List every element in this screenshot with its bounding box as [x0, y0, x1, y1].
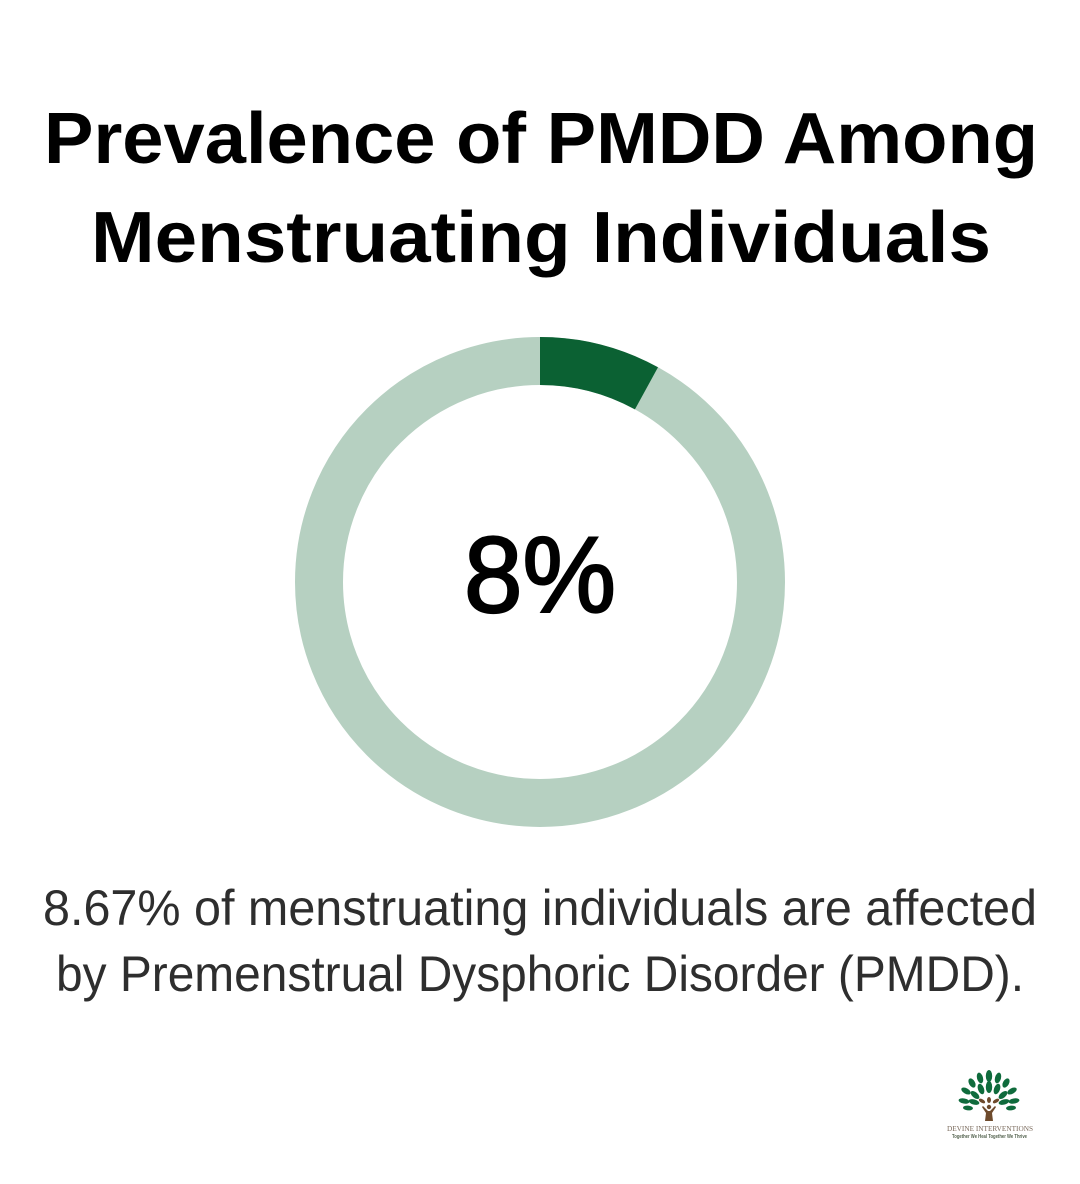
description: 8.67% of menstruating individuals are affected	[43, 880, 1037, 936]
logo: Devine Interventions	[947, 1070, 1033, 1140]
icon: tree trunk figure	[978, 1097, 1000, 1121]
title	[44, 99, 1038, 278]
donut chart	[319, 337, 761, 803]
donut segment: 8%	[540, 337, 658, 409]
icon: tree leaves	[958, 1070, 1020, 1111]
title: Menstruating Individuals	[91, 198, 991, 278]
center value: 8%	[464, 514, 616, 635]
logo tagline: Together We Heal Together We Thrive	[952, 1134, 1027, 1140]
title: Prevalence of PMDD Among	[44, 99, 1038, 179]
description: by Premenstrual Dysphoric Disorder (PMDD).	[56, 946, 1024, 1002]
logo name: DEVINE INTERVENTIONS	[947, 1125, 1033, 1133]
description	[43, 880, 1037, 1002]
